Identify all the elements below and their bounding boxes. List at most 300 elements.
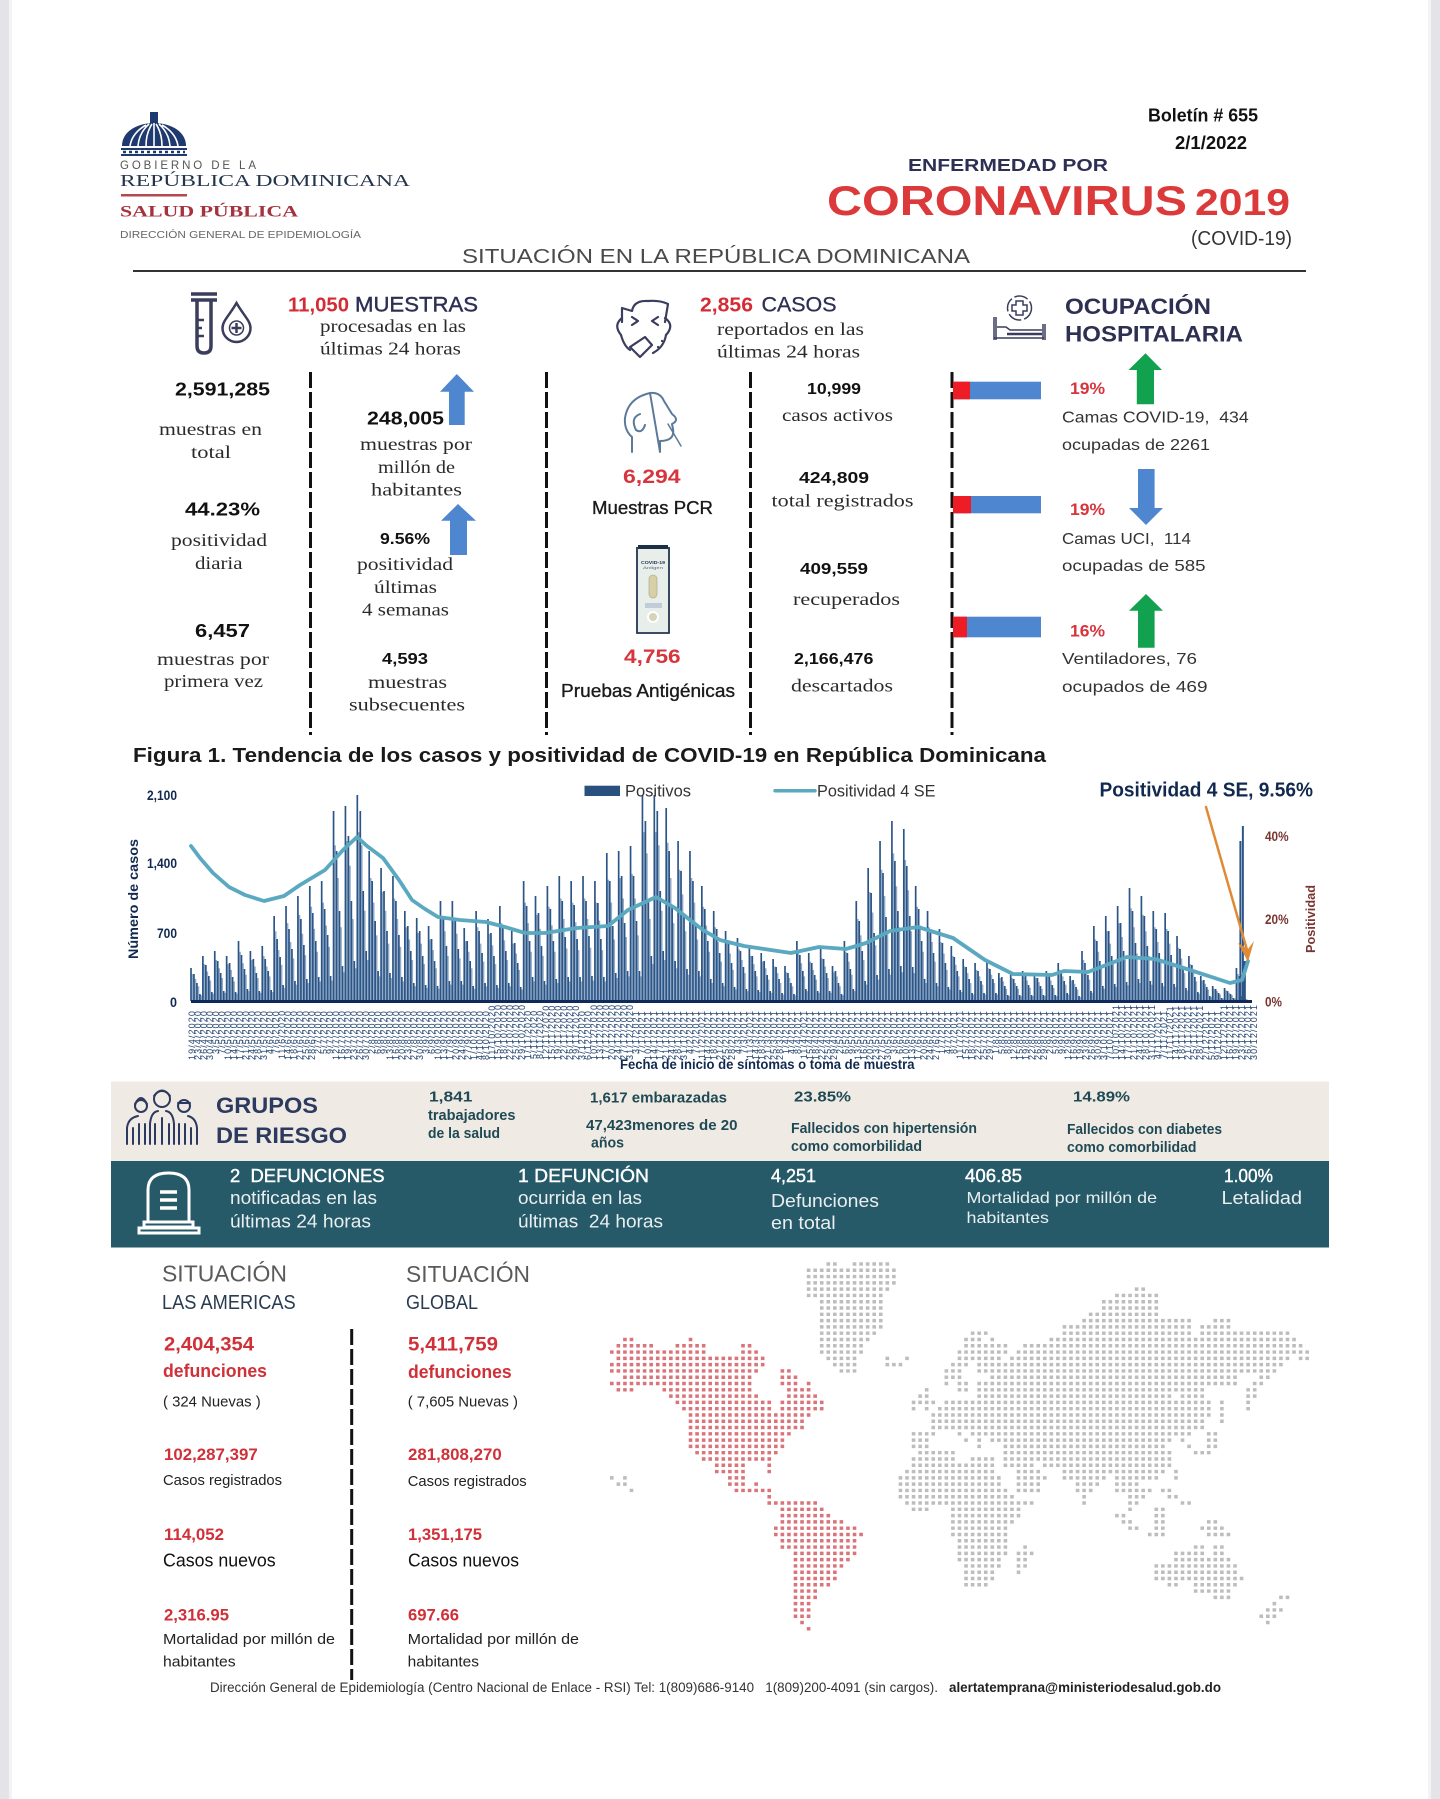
- x axis date labels: 28/3/2021: [775, 1010, 785, 1060]
- x axis date labels: 31/1/2021: [679, 1010, 689, 1060]
- x axis date labels: 28/10/2021: [1141, 1004, 1151, 1060]
- x axis date labels: 3/5/2020: [211, 1010, 221, 1054]
- x axis date labels: 23/9/2021: [1081, 1010, 1091, 1060]
- x axis date labels: 15/7/2021: [961, 1010, 971, 1060]
- recuperados: [793, 561, 900, 609]
- defunciones en total: en total: [771, 1213, 836, 1233]
- mortalidad: 2,316.95: [164, 1607, 229, 1625]
- casos activos: 10,999: [807, 381, 861, 398]
- y axis: número de casos: Número de casos: [125, 839, 141, 959]
- casos heading: CASOS: [762, 294, 836, 316]
- ocupación heading: HOSPITALARIA: [1065, 322, 1243, 347]
- trabajadores de la salud: de la salud: [428, 1125, 500, 1142]
- fallecidos con hipertensión: como comorbilidad: [791, 1138, 922, 1155]
- total registrados: total registrados: [772, 491, 914, 511]
- fallecidos con hipertensión: 23.85%: [794, 1089, 851, 1106]
- logo: Gobierno de la República Dominicana: REPÚBLICA DOMINICANA: [120, 171, 411, 190]
- muestras en total: [159, 378, 270, 462]
- x axis date labels: 17/10/2021: [1123, 1004, 1133, 1060]
- arrow: up, muestras por millón: [440, 374, 474, 425]
- icon: nasal swab: [625, 393, 681, 452]
- x axis date labels: 10/5/2020: [223, 1010, 233, 1060]
- defunciones en total: [771, 1166, 879, 1233]
- x axis date labels: 3/9/2020: [421, 1010, 431, 1054]
- legend: Positivos: [625, 782, 691, 801]
- x axis date labels: 21/5/2020: [241, 1010, 251, 1060]
- panel: situación global: [406, 1261, 579, 1671]
- x axis date labels: 19/11/2020: [553, 1005, 563, 1060]
- x axis date labels: 6/12/2020: [583, 1010, 593, 1060]
- icon: test tube and drop: [191, 294, 250, 353]
- x axis title: Fecha de inicio de síntomas o toma de muestra: [620, 1056, 915, 1072]
- x axis date labels: 20/8/2020: [397, 1010, 407, 1060]
- muestras subsecuentes: [349, 651, 465, 715]
- x axis date labels: 25/2/2021: [721, 1010, 731, 1060]
- x axis date labels: 14/2/2021: [703, 1010, 713, 1060]
- x axis date labels: 29/8/2021: [1039, 1010, 1049, 1060]
- y axis: número de casos: 2,100: [147, 787, 177, 803]
- total registrados: [772, 470, 914, 511]
- casos nuevos: 1,351,175: [408, 1526, 482, 1544]
- ventiladores stats: [1062, 622, 1208, 696]
- x axis date labels: 13/8/2020: [385, 1010, 395, 1060]
- positividad últimas 4 semanas: 9.56%: [380, 531, 430, 548]
- casos heading: reportados en las: [717, 319, 864, 339]
- x axis date labels: 17/5/2020: [235, 1010, 245, 1060]
- bar: camas COVID-19: [953, 382, 1041, 399]
- mortalidad: Mortalidad por millón de: [408, 1631, 579, 1648]
- letalidad: Letalidad: [1222, 1188, 1302, 1208]
- x axis date labels: 14/11/2021: [1171, 1005, 1181, 1060]
- x axis date labels: 14/1/2021: [649, 1010, 659, 1060]
- x axis date labels: 13/5/2021: [853, 1010, 863, 1060]
- defunciones notificadas: [230, 1166, 385, 1232]
- title: [827, 155, 1292, 250]
- x axis date labels: 12/8/2021: [1009, 1010, 1019, 1060]
- x axis date labels: 29/11/2020: [571, 1005, 581, 1060]
- x axis date labels: 21/6/2020: [295, 1010, 305, 1060]
- casos registrados: [408, 1446, 527, 1490]
- x axis date labels: 29/10/2020: [517, 1004, 527, 1060]
- camas COVID-19 stats: 19%: [1070, 379, 1105, 398]
- casos registrados: Casos registrados: [408, 1473, 527, 1490]
- defunción ocurrida: ocurrida en las: [518, 1188, 642, 1208]
- trabajadores de la salud: [428, 1089, 516, 1142]
- arrow: up green: [1129, 594, 1163, 648]
- x axis date labels: 24/1/2021: [667, 1010, 677, 1060]
- x axis date labels: 18/6/2020: [289, 1010, 299, 1060]
- x axis date labels: 15/4/2021: [805, 1010, 815, 1060]
- x axis date labels: 6/8/2020: [373, 1010, 383, 1054]
- x axis date labels: 13/12/2020: [595, 1004, 605, 1060]
- icon: antigen test cassette: COVID-19: [641, 560, 666, 565]
- casos nuevos: 114,052: [164, 1526, 224, 1544]
- x axis date labels: 17/6/2021: [913, 1010, 923, 1060]
- footer: alertatemprana@ministeriodesalud.gob.do: [949, 1680, 1221, 1695]
- defunciones notificadas: últimas 24 horas: [230, 1212, 371, 1232]
- x axis date labels: 5/11/2020: [529, 1010, 539, 1059]
- positividad diaria: 44.23%: [185, 498, 260, 520]
- casos nuevos: Casos nuevos: [408, 1550, 519, 1571]
- x axis date labels: 7/1/2021: [637, 1010, 647, 1054]
- panel: ocupación hospitalaria: [953, 294, 1249, 696]
- x axis date labels: 30/7/2020: [361, 1010, 371, 1060]
- x axis date labels: 12/9/2021: [1063, 1010, 1073, 1060]
- heading: SITUACIÓN: [162, 1261, 287, 1287]
- x axis date labels: 28/11/2021: [1195, 1005, 1205, 1060]
- muestras por millón de habitantes: 248,005: [367, 407, 444, 428]
- x axis date labels: 5/9/2021: [1051, 1010, 1061, 1054]
- defunciones: 2,404,354: [164, 1335, 254, 1356]
- mortalidad: habitantes: [163, 1654, 236, 1671]
- muestras heading: procesadas en las: [320, 316, 466, 336]
- x axis date labels: 29/4/2021: [829, 1010, 839, 1060]
- casos registrados: Casos registrados: [163, 1472, 282, 1489]
- letalidad: 1.00%: [1224, 1166, 1273, 1186]
- x axis date labels: 16/7/2020: [337, 1010, 347, 1060]
- x axis date labels: 5/12/2021: [1207, 1010, 1217, 1060]
- x axis date labels: 7/2/2021: [691, 1010, 701, 1054]
- x axis date labels: 7/6/2020: [271, 1010, 281, 1054]
- muestras PCR: Muestras PCR: [592, 498, 713, 518]
- grupos de riesgo heading: DE RIESGO: [216, 1123, 347, 1148]
- casos heading: últimas 24 horas: [717, 341, 860, 361]
- icon: face with mask: [617, 301, 670, 357]
- muestras por millón de habitantes: millón de: [378, 457, 455, 477]
- x axis date labels: 21/3/2021: [763, 1010, 773, 1060]
- logo: Gobierno de la República Dominicana: GOBIERNO DE LA: [120, 160, 256, 172]
- x axis date labels: 14/6/2020: [283, 1010, 293, 1060]
- camas UCI stats: ocupadas de 585: [1062, 558, 1206, 575]
- defunciones: [408, 1335, 518, 1411]
- casos activos: casos activos: [782, 405, 893, 425]
- casos heading: 2,856: [700, 294, 753, 316]
- camas COVID-19 stats: ocupadas de 2261: [1062, 437, 1210, 454]
- line: positividad 4 SE: [191, 837, 1248, 983]
- x axis date labels: 4/4/2021: [787, 1010, 797, 1054]
- x axis date labels: 23/5/2021: [871, 1010, 881, 1060]
- x axis date labels: 9/5/2021: [847, 1010, 857, 1054]
- x axis date labels: 2/8/2020: [367, 1010, 377, 1054]
- x axis date labels: 22/11/2020: [559, 1005, 569, 1060]
- muestras PCR: [592, 467, 713, 518]
- x axis date labels: 20/6/2021: [919, 1010, 929, 1060]
- bulletin number and date: Boletín # 655: [1148, 106, 1258, 126]
- grupos de riesgo heading: GRUPOS: [216, 1093, 318, 1118]
- icon: three people: [127, 1090, 197, 1144]
- positividad últimas 4 semanas: [357, 531, 453, 620]
- x axis date labels: 16/9/2021: [1069, 1010, 1079, 1060]
- defunciones: ( 7,605 Nuevas ): [408, 1394, 518, 1411]
- x axis date labels: 30/8/2020: [415, 1010, 425, 1060]
- x axis date labels: 11/2/2021: [697, 1010, 707, 1059]
- muestras subsecuentes: 4,593: [382, 651, 428, 668]
- camas COVID-19 stats: [1062, 379, 1249, 454]
- x axis date labels: 20/5/2021: [865, 1010, 875, 1060]
- bar and line chart: cases and positivity: [125, 780, 1318, 1072]
- y axis: número de casos: [125, 787, 177, 1010]
- heading: [406, 1261, 530, 1314]
- x axis date labels: 19/4/2020: [187, 1010, 197, 1060]
- camas COVID-19 stats: Camas COVID-19, 434: [1062, 410, 1249, 427]
- x axis date labels: 8/4/2021: [793, 1010, 803, 1054]
- x axis date labels: 9/12/2021: [1213, 1010, 1223, 1060]
- x axis date labels: 18/7/2021: [967, 1010, 977, 1060]
- x axis date labels: 27/5/2021: [877, 1010, 887, 1060]
- icon: tombstone: [139, 1173, 199, 1233]
- x axis date labels: 17/9/2020: [445, 1010, 455, 1060]
- x axis date labels: 20/12/2020: [607, 1004, 617, 1060]
- mortalidad: 697.66: [408, 1607, 459, 1625]
- logo: Gobierno de la República Dominicana: DIRECCIÓN GENERAL DE EPIDEMIOLOGÍA: [120, 228, 361, 241]
- y axis: número de casos: 1,400: [147, 855, 177, 871]
- positividad diaria: positividad: [171, 530, 267, 550]
- muestras por primera vez: 6,457: [195, 620, 250, 641]
- fallecidos con hipertensión: [791, 1089, 977, 1155]
- x axis date labels: 25/4/2021: [823, 1010, 833, 1060]
- x axis date labels: 30/9/2021: [1093, 1010, 1103, 1060]
- casos heading: [700, 294, 864, 361]
- defunción ocurrida: 1 DEFUNCIÓN: [518, 1165, 649, 1186]
- positividad diaria: [171, 498, 267, 573]
- icon: hospital bed: [994, 296, 1045, 340]
- fallecidos con hipertensión: Fallecidos con hipertensión: [791, 1120, 977, 1137]
- defunciones en total: 4,251: [771, 1166, 816, 1186]
- x axis date labels: 4/7/2021: [943, 1010, 953, 1054]
- logo: Gobierno de la República Dominicana: SALUD PÚBLICA: [120, 204, 299, 220]
- x axis date labels: 16/8/2020: [391, 1010, 401, 1060]
- x axis date labels: 12/7/2020: [331, 1010, 341, 1060]
- x axis date labels: 24/5/2020: [247, 1010, 257, 1060]
- x axis date labels: 1/7/2021: [937, 1010, 947, 1054]
- x axis date labels: 1/11/2020: [523, 1010, 533, 1059]
- x axis date labels: 10/1/2021: [643, 1010, 653, 1060]
- x axis date labels: 6/9/2020: [427, 1010, 437, 1054]
- x axis date labels: 29/7/2021: [985, 1010, 995, 1060]
- y axis: positividad: 20%: [1265, 911, 1289, 927]
- x axis date labels: 16/12/2021: [1225, 1004, 1235, 1060]
- x axis date labels: 3/10/2021: [1099, 1010, 1109, 1060]
- x axis date labels: 19/7/2020: [343, 1010, 353, 1060]
- x axis date labels: 26/11/2020: [565, 1005, 575, 1060]
- ventiladores stats: ocupados de 469: [1062, 679, 1208, 696]
- defunción ocurrida: [518, 1165, 663, 1232]
- muestras por primera vez: primera vez: [164, 671, 263, 691]
- x axis date labels: 22/4/2021: [817, 1010, 827, 1060]
- arrow: up green: [1128, 353, 1162, 404]
- x axis date labels: 26/9/2021: [1087, 1010, 1097, 1060]
- camas UCI stats: 19%: [1070, 500, 1105, 519]
- x axis date labels: 1/4/2021: [781, 1010, 791, 1054]
- x axis date labels: 23/8/2020: [403, 1010, 413, 1060]
- fallecidos con diabetes: [1067, 1089, 1222, 1156]
- x axis date labels: 28/1/2021: [673, 1010, 683, 1060]
- logo: Gobierno de la República Dominicana: [120, 112, 411, 241]
- title: ENFERMEDAD POR: [908, 155, 1108, 175]
- x axis date labels: 7/11/2021: [1159, 1010, 1169, 1059]
- x axis date labels: 24/12/2020: [613, 1004, 623, 1060]
- y axis: número de casos: 700: [157, 925, 177, 941]
- x axis date labels: 2/12/2021: [1201, 1010, 1211, 1060]
- x axis date labels: 24/6/2021: [925, 1010, 935, 1060]
- mortalidad: [163, 1607, 335, 1671]
- bulletin number and date: [1148, 106, 1258, 153]
- muestras en total: muestras en: [159, 419, 262, 439]
- x axis date labels: 4/2/2021: [685, 1010, 695, 1054]
- x axis date labels: 27/6/2021: [931, 1010, 941, 1060]
- x axis date labels: 4/11/2021: [1153, 1010, 1163, 1059]
- x axis date labels: 3/6/2021: [889, 1010, 899, 1054]
- embarazadas y menores: 1,617 embarazadas: [590, 1090, 727, 1107]
- x axis date labels: 11/11/2021: [1165, 1005, 1175, 1060]
- fallecidos con diabetes: 14.89%: [1073, 1089, 1130, 1106]
- title: CORONAVIRUS: [827, 177, 1187, 224]
- panel: situación las Américas: [162, 1261, 335, 1671]
- ventiladores stats: Ventiladores, 76: [1062, 651, 1197, 668]
- ocupación heading: OCUPACIÓN: [1065, 294, 1211, 319]
- muestras subsecuentes: muestras: [368, 672, 447, 692]
- dotted world map with the Americas highlighted: [610, 1264, 1312, 1629]
- defunciones: defunciones: [408, 1362, 512, 1382]
- x axis date labels: 25/6/2020: [301, 1010, 311, 1060]
- x axis date labels: 12/11/2020: [541, 1005, 551, 1060]
- x axis date labels: 10/6/2021: [901, 1010, 911, 1060]
- icon: dome: [121, 112, 187, 156]
- embarazadas y menores: 47,423menores de 20: [586, 1117, 738, 1134]
- muestras heading: últimas 24 horas: [320, 338, 461, 358]
- panel: casos: [561, 294, 914, 701]
- heading: SITUACIÓN: [406, 1261, 530, 1287]
- x axis date labels: 16/5/2021: [859, 1010, 869, 1060]
- panel: muestras: [157, 294, 478, 715]
- x axis date labels: 24/9/2020: [457, 1010, 467, 1060]
- icon: antigen test cassette: [637, 545, 669, 633]
- x axis date labels: 11/7/2021: [955, 1010, 965, 1059]
- defunciones: [163, 1335, 267, 1411]
- x axis date labels: 30/4/2020: [205, 1010, 215, 1060]
- x axis date labels: 22/8/2021: [1027, 1010, 1037, 1060]
- x axis date labels: 7/10/2021: [1105, 1010, 1115, 1060]
- x axis date labels: 10/10/2021: [1111, 1004, 1121, 1060]
- mortalidad por millón: 406.85: [965, 1166, 1022, 1186]
- x axis date labels: 23/12/2021: [1237, 1004, 1247, 1060]
- fallecidos con diabetes: Fallecidos con diabetes: [1067, 1121, 1222, 1138]
- recuperados: 409,559: [800, 561, 868, 578]
- y axis: positividad: 40%: [1265, 828, 1289, 844]
- arrow: down blue: [1129, 469, 1163, 525]
- heading: [162, 1261, 296, 1314]
- x axis date labels: 10/9/2020: [433, 1010, 443, 1060]
- pruebas antigénicas: 4,756: [624, 647, 681, 668]
- defunciones: defunciones: [163, 1361, 267, 1381]
- muestras subsecuentes: subsecuentes: [349, 695, 465, 715]
- x axis date labels: 27/9/2020: [463, 1010, 473, 1060]
- x axis date labels: 15/10/2020: [493, 1004, 503, 1060]
- x axis date labels: 1/8/2021: [991, 1010, 1001, 1054]
- x axis date labels: 18/11/2021: [1177, 1005, 1187, 1060]
- defunciones notificadas: 2 DEFUNCIONES: [230, 1166, 385, 1186]
- embarazadas y menores: [586, 1090, 738, 1152]
- x axis date labels: 17/12/2020: [601, 1004, 611, 1060]
- x axis date labels: 19/8/2021: [1021, 1010, 1031, 1060]
- x axis date labels: 8/8/2021: [1003, 1010, 1013, 1054]
- icon: antigen test cassette: Antigen: [643, 566, 663, 570]
- mortalidad por millón: habitantes: [966, 1210, 1049, 1227]
- camas UCI stats: [1062, 500, 1206, 575]
- title: 2019: [1195, 182, 1290, 223]
- x axis date labels: 28/5/2020: [253, 1010, 263, 1060]
- callout: positividad 4 SE, 9.56%: Positividad 4 SE, 9.56%: [1100, 780, 1313, 802]
- x axis date labels: 15/8/2021: [1015, 1010, 1025, 1060]
- x axis date labels: 22/10/2020: [505, 1004, 515, 1060]
- bar: ventiladores: [953, 617, 1041, 637]
- x axis date labels: 4/6/2020: [265, 1010, 275, 1054]
- muestras heading: MUESTRAS: [355, 294, 478, 316]
- y axis: positividad: [1265, 828, 1318, 1010]
- x axis date labels: 11/10/2020: [487, 1005, 497, 1060]
- x axis date labels: 4/3/2021: [733, 1010, 743, 1054]
- casos nuevos: [163, 1526, 276, 1571]
- x axis date labels: [187, 1004, 1259, 1060]
- pruebas antigénicas: [561, 647, 735, 701]
- x axis date labels: 8/7/2021: [949, 1010, 959, 1054]
- muestras heading: 11,050: [288, 294, 349, 316]
- x axis date labels: 31/12/2020: [625, 1004, 635, 1060]
- mortalidad: Mortalidad por millón de: [163, 1631, 335, 1648]
- x axis date labels: 20/9/2020: [451, 1010, 461, 1060]
- defunciones: 5,411,759: [408, 1335, 498, 1356]
- x axis date labels: 2/5/2021: [835, 1010, 845, 1054]
- y axis: positividad: 0%: [1265, 994, 1282, 1010]
- title: (COVID-19): [1191, 228, 1292, 250]
- muestras por primera vez: [157, 620, 269, 691]
- heading: situación en la República Dominicana: SITUACIÓN EN LA REPÚBLICA DOMINICANA: [462, 245, 971, 268]
- heading: LAS AMERICAS: [162, 1292, 296, 1314]
- x axis date labels: 19/12/2021: [1231, 1004, 1241, 1060]
- bars: positivos: [191, 795, 1247, 1001]
- x axis date labels: 18/10/2020: [499, 1004, 509, 1060]
- defunciones: ( 324 Nuevas ): [163, 1394, 261, 1411]
- mortalidad por millón: [965, 1166, 1157, 1227]
- legend: Positividad 4 SE: [817, 782, 936, 801]
- x axis date labels: 25/11/2021: [1189, 1005, 1199, 1060]
- casos nuevos: Casos nuevos: [163, 1550, 276, 1571]
- muestras en total: total: [191, 442, 231, 462]
- x axis date labels: 21/10/2021: [1129, 1004, 1139, 1060]
- x axis date labels: 26/8/2021: [1033, 1010, 1043, 1060]
- x axis date labels: 26/4/2020: [199, 1010, 209, 1060]
- x axis date labels: 11/3/2021: [745, 1010, 755, 1059]
- x axis baseline: [191, 1000, 1252, 1003]
- casos registrados: 281,808,270: [408, 1446, 502, 1464]
- arrow: orange callout arrow: [1206, 807, 1254, 962]
- x axis date labels: 31/5/2020: [259, 1010, 269, 1060]
- x axis date labels: 31/10/2021: [1147, 1004, 1157, 1060]
- defunción ocurrida: últimas 24 horas: [518, 1212, 663, 1232]
- x axis date labels: 25/7/2021: [979, 1010, 989, 1060]
- x axis date labels: 27/12/2020: [619, 1004, 629, 1060]
- x axis date labels: 1/10/2020: [469, 1010, 479, 1060]
- x axis date labels: 11/4/2021: [799, 1010, 809, 1059]
- x axis date labels: 26/12/2021: [1243, 1004, 1253, 1060]
- total registrados: 424,809: [799, 470, 869, 487]
- heading: GLOBAL: [406, 1292, 478, 1314]
- x axis date labels: 8/11/2020: [535, 1010, 545, 1059]
- x axis date labels: 25/10/2020: [511, 1004, 521, 1060]
- casos activos: [782, 381, 893, 425]
- bar: camas UCI: [953, 496, 1041, 513]
- x axis date labels: 8/10/2020: [481, 1010, 491, 1060]
